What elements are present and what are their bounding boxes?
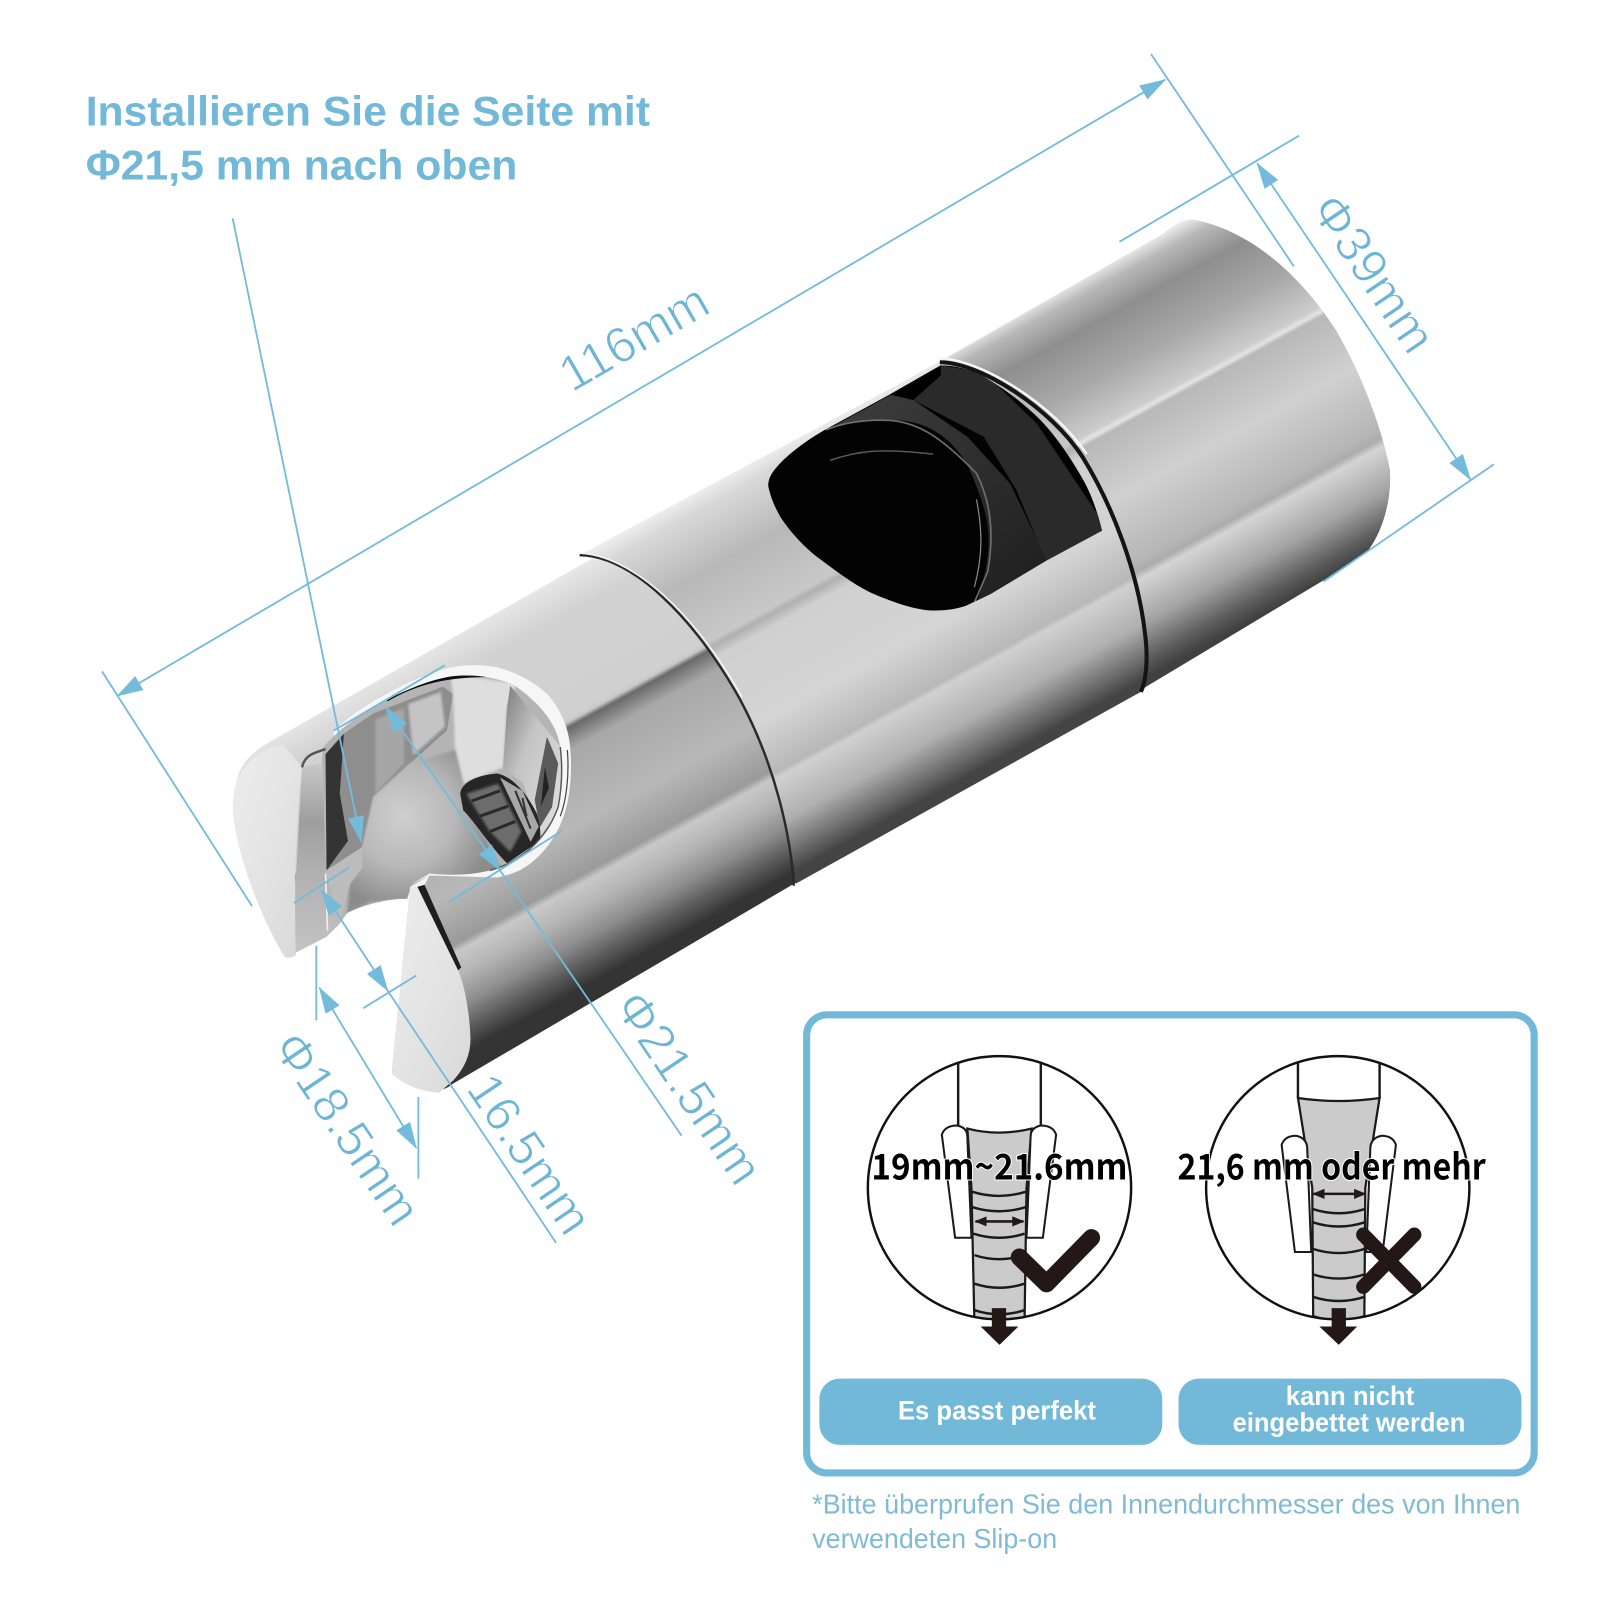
chrome ring xyxy=(334,665,571,884)
adjustment window xyxy=(768,365,1102,610)
icon: check mark xyxy=(1019,1238,1091,1284)
right sleeve xyxy=(940,219,1390,705)
seam lines xyxy=(578,358,1147,886)
screw opening xyxy=(460,773,540,863)
size label: 19mm~21.6mm xyxy=(871,1140,1128,1191)
icon: cross mark xyxy=(1363,1235,1414,1287)
footnote: verwendeten Slip-on xyxy=(812,1523,1057,1554)
top notch xyxy=(891,365,941,400)
arrow: down xyxy=(1319,1308,1357,1345)
dimension: 16.5mm xyxy=(294,867,603,1245)
circle outline xyxy=(1206,1056,1469,1319)
right jaw end face xyxy=(392,876,470,1093)
outer dark band xyxy=(913,365,1107,563)
button: does not fit: kann nicht xyxy=(1286,1381,1414,1411)
body silhouette xyxy=(234,219,1390,1091)
title xyxy=(86,88,650,189)
reflection arcs xyxy=(827,420,991,602)
button: fits xyxy=(819,1379,1162,1445)
cup recess xyxy=(322,665,571,936)
leader: insert direction xyxy=(233,218,361,842)
button: does not fit xyxy=(1179,1379,1521,1445)
width arrow xyxy=(976,1220,1023,1223)
dimension: diameter 21.5mm: Φ21.5mm xyxy=(604,981,774,1195)
panel: compatibility guide xyxy=(807,1015,1534,1473)
dimension: diameter 18.5mm: Φ18.5mm xyxy=(262,1021,432,1236)
arrow: down xyxy=(981,1308,1018,1345)
bright centre xyxy=(450,673,516,784)
title: Φ21,5 mm nach oben xyxy=(86,142,517,189)
inner fold xyxy=(826,395,1047,602)
clip arms xyxy=(942,1126,1056,1238)
left jaw side wall xyxy=(287,763,340,957)
centre sleeve xyxy=(580,362,1147,884)
title: Installieren Sie die Seite mit xyxy=(86,88,650,135)
clip arms xyxy=(1282,1136,1396,1252)
dimension: 16.5mm: 16.5mm xyxy=(456,1063,603,1245)
dark strip xyxy=(326,734,348,870)
diagram: non-fitting rail xyxy=(1178,1051,1486,1345)
circle outline xyxy=(868,1056,1131,1319)
dimension: diameter 39mm xyxy=(1119,136,1494,582)
lip shadow xyxy=(387,676,490,700)
dimension: diameter 21.5mm xyxy=(334,665,774,1195)
left jaw end face xyxy=(233,745,328,958)
button: fits: Es passt perfekt xyxy=(898,1395,1096,1425)
dimension: 116mm xyxy=(102,54,1294,906)
button: does not fit: eingebettet werden xyxy=(1233,1408,1465,1438)
diagram: fitting rail xyxy=(868,1051,1131,1345)
dimension: 116mm: 116mm xyxy=(549,273,718,403)
size label: 21,6 mm oder mehr xyxy=(1178,1140,1486,1191)
footnote: *Bitte überprufen Sie den Innendurchmesser des von Ihnen xyxy=(812,1488,1520,1519)
dimension: diameter 39mm: Φ39mm xyxy=(1300,184,1447,363)
product: chrome shower rail slider xyxy=(233,219,1390,1093)
lower blob xyxy=(347,750,505,913)
width arrow xyxy=(1313,1193,1365,1195)
footnote xyxy=(812,1488,1520,1554)
right chrome xyxy=(503,686,563,837)
upper reflection xyxy=(327,687,453,870)
